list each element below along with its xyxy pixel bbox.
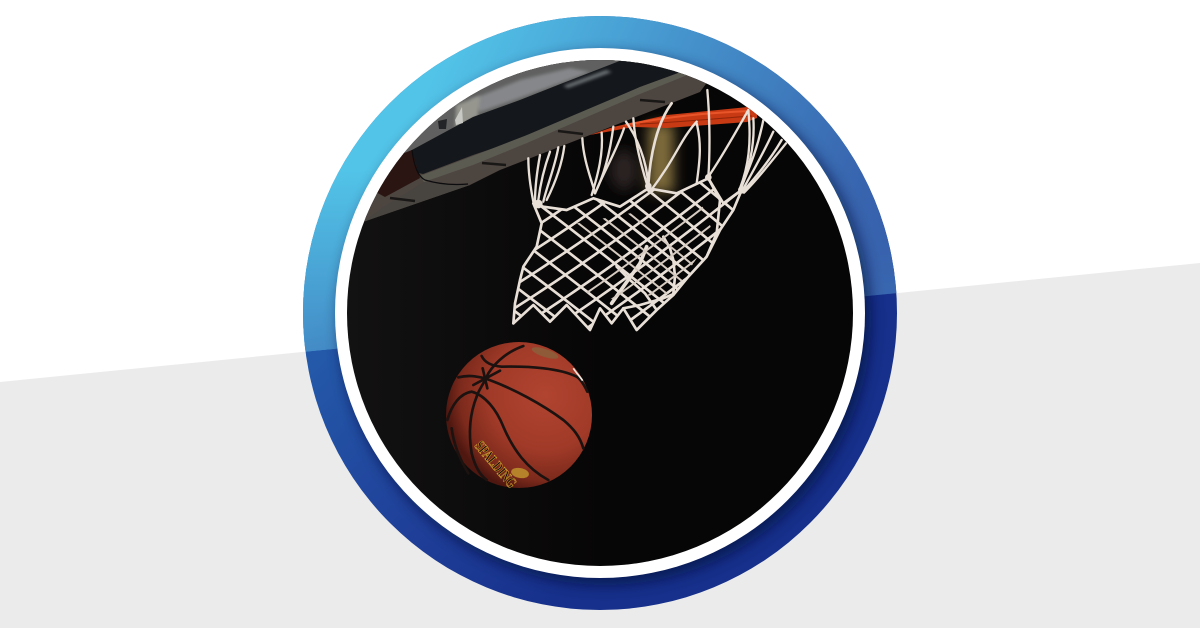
net: upper strands (528, 90, 786, 202)
hoop glow behind net (610, 124, 674, 192)
backboard (364, 60, 706, 222)
white ring (335, 48, 865, 578)
orange rim (590, 107, 757, 135)
ball logo (511, 468, 529, 478)
net: outer edges and knots (513, 175, 744, 330)
gradient blue ring (303, 16, 897, 610)
net: diamond mesh (516, 180, 739, 328)
basketball (446, 342, 592, 492)
ball brand text: SPALDING (471, 438, 519, 492)
background: gray diagonal band (0, 263, 1200, 628)
ball seams (447, 346, 587, 480)
photo: basketball falling through net (347, 60, 853, 566)
net: denser back layer (577, 206, 711, 300)
net (512, 88, 788, 332)
ball top logo patch (532, 347, 558, 359)
ball highlight (573, 368, 583, 381)
ring inner shadow (339, 53, 871, 585)
